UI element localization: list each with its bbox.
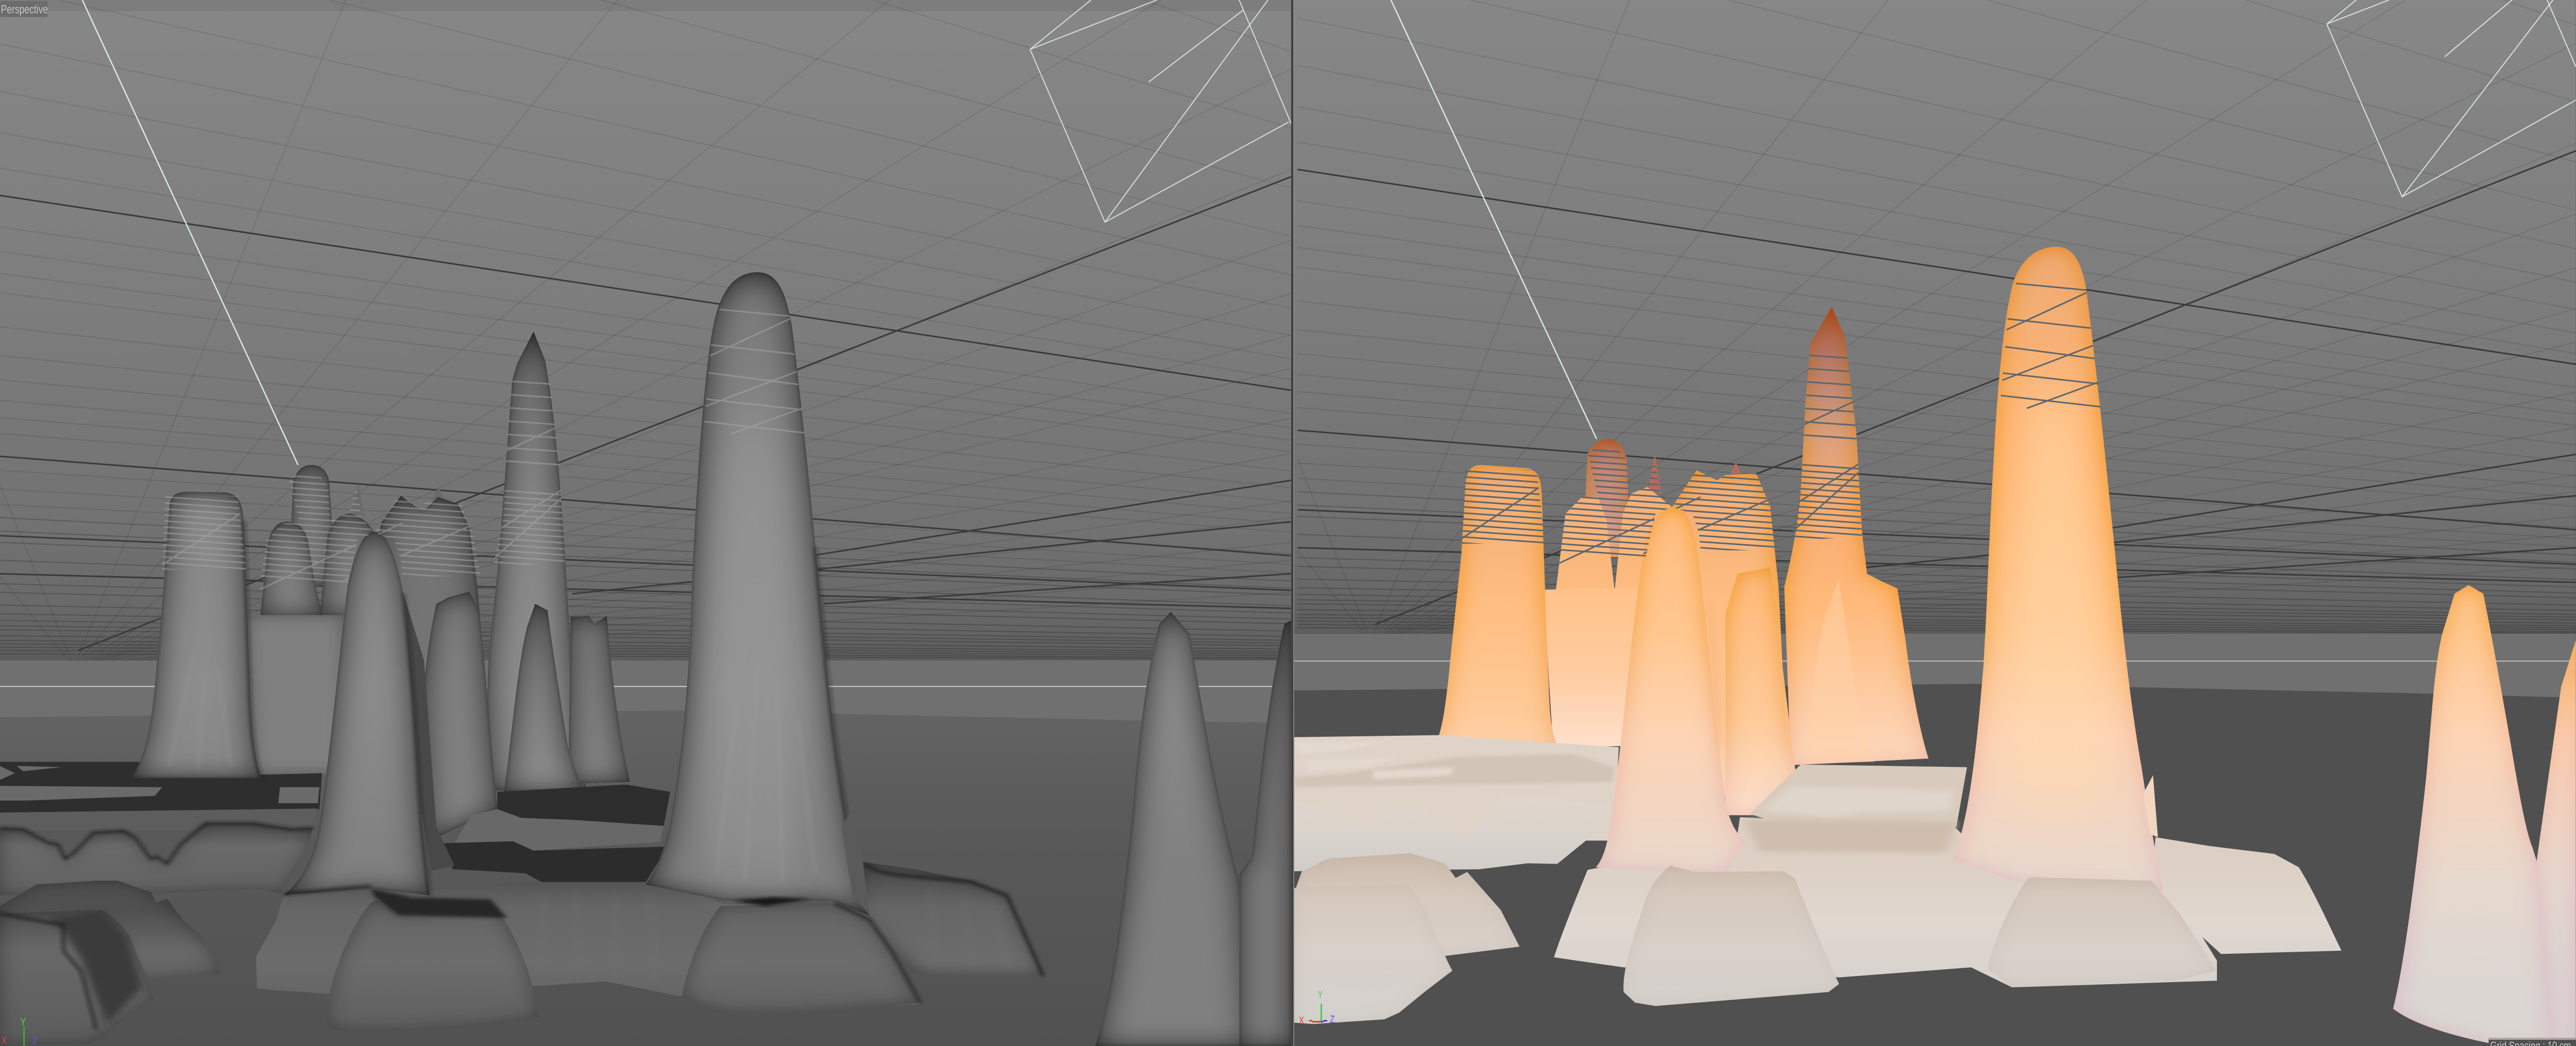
main spire highlight bbox=[708, 414, 799, 881]
view name tag: Perspective bbox=[1, 3, 48, 16]
crease line on front left piece bbox=[0, 913, 96, 1030]
left column right crease bbox=[244, 520, 262, 778]
horizon white line bbox=[1291, 661, 2576, 662]
left big flat-top column bbox=[1432, 465, 1562, 752]
spike: small back bbox=[350, 484, 365, 517]
spike: small red left bbox=[1648, 453, 1662, 494]
dark ground plane bbox=[0, 711, 1267, 890]
viewport header bar bbox=[0, 0, 1291, 11]
spire: back centre stub bbox=[1615, 487, 1676, 591]
crease under main spire bbox=[733, 897, 811, 906]
terrain piece: front left rear bbox=[0, 881, 222, 981]
rear terrain band bbox=[0, 808, 317, 831]
cluster of mid spires bbox=[377, 496, 496, 814]
terrace behind centre bbox=[1750, 765, 1967, 827]
grid lines showing through spire tops bbox=[1455, 281, 2102, 573]
front spire bbox=[1596, 507, 1745, 874]
spire: back centre stub bbox=[319, 514, 380, 616]
plateau pale ledge bbox=[1294, 742, 1455, 779]
axis gizmo right: Z bbox=[1330, 1014, 1335, 1025]
spike: small red right bbox=[1731, 462, 1741, 474]
axis gizmo right: X bbox=[1299, 1015, 1304, 1026]
spire: far back rounded bbox=[288, 465, 333, 587]
plateau pale slivers bbox=[0, 766, 319, 803]
front spire right crease bbox=[403, 594, 430, 895]
central terrain mass bbox=[257, 882, 921, 1014]
centre terrace band bbox=[1743, 819, 1956, 853]
spire: back inner pale bbox=[1803, 579, 1874, 764]
bump: under main spire bbox=[1988, 878, 2217, 987]
main spire right crease bbox=[815, 547, 858, 867]
dark ground plane bbox=[1291, 684, 2576, 1046]
rear dark plateau bbox=[0, 762, 322, 813]
pale terrace strip bbox=[1762, 786, 1955, 817]
spire: lower right bbox=[1095, 612, 1251, 1046]
axis gizmo left: Y bbox=[21, 1016, 26, 1027]
long white wire edge bbox=[82, 0, 298, 465]
crease lines on terrain bbox=[284, 886, 921, 1003]
wireframe camera box bbox=[2327, 0, 2576, 197]
horizon band bbox=[0, 661, 1291, 727]
spire: far back red tip bbox=[1583, 439, 1630, 557]
main spire bbox=[646, 272, 870, 915]
upper dark terrace middle bbox=[497, 785, 670, 826]
axis gizmo left bbox=[2, 1016, 37, 1046]
sky backdrop bbox=[0, 0, 1291, 661]
main spire glow bbox=[2012, 400, 2102, 801]
rear terrain wall with jagged top bbox=[0, 823, 313, 895]
left lobe under front spire bbox=[256, 890, 379, 994]
bump: under main spire bbox=[682, 903, 921, 1014]
left big flat-top column bbox=[132, 492, 262, 778]
grid lines showing through spire tops bbox=[156, 308, 806, 600]
rear plateau terrain bbox=[1294, 735, 1619, 840]
axis gizmo left: X bbox=[2, 1035, 7, 1046]
long white wire edge bbox=[1391, 0, 1597, 439]
panel: orange temperature-shaded viewport bbox=[1291, 0, 2576, 1046]
perspective floor grid bbox=[1297, 0, 2576, 641]
spike: small back right bbox=[431, 487, 445, 500]
terrain piece: front left near bbox=[0, 910, 155, 1046]
central terrain mass bbox=[1554, 817, 2217, 987]
left column streaks bbox=[169, 654, 230, 770]
right terrain lobe bbox=[856, 862, 1043, 976]
panel: grey clay-shaded viewport bbox=[0, 0, 1291, 1046]
spire: back left stub bbox=[1555, 497, 1615, 593]
sky backdrop bbox=[1291, 0, 2576, 634]
pale terrace middle bbox=[454, 809, 664, 851]
block wall between columns bbox=[245, 615, 349, 774]
central terrain streaks bbox=[539, 887, 1009, 981]
back right ridge bbox=[568, 616, 630, 784]
horizon white line bbox=[0, 686, 1291, 687]
front spire side sliver bbox=[403, 594, 454, 871]
spire: back inner bbox=[504, 604, 583, 792]
spire: far right edge bbox=[2536, 640, 2576, 1046]
rear wall crease line bbox=[0, 823, 313, 864]
bump: front centre bbox=[1623, 865, 1839, 1006]
axis gizmo left: Z bbox=[32, 1035, 37, 1046]
spire: back left stub bbox=[260, 521, 323, 616]
spire: mid jagged top bbox=[1725, 567, 1798, 815]
rear terrain wall with jagged top bbox=[1294, 797, 1611, 871]
horizon band bbox=[1291, 634, 2576, 700]
main spire jagged side fin bbox=[841, 803, 870, 915]
spire: tall red-tipped needle bbox=[1784, 307, 1928, 765]
spire: mid jagged top bbox=[423, 592, 497, 842]
terrain piece: front left near bbox=[1294, 885, 1452, 1024]
plateau darker terrace bbox=[1294, 754, 1614, 787]
central dark terrace bbox=[443, 841, 668, 884]
terrain piece: front left rear bbox=[1296, 853, 1519, 956]
wireframe camera box bbox=[1030, 0, 1291, 222]
main spire side fin bbox=[2143, 775, 2158, 837]
bump: front centre bbox=[327, 900, 539, 1032]
front spire bbox=[284, 532, 430, 895]
viewport divider bbox=[1292, 0, 1294, 1046]
block wall between columns bbox=[1544, 588, 1641, 747]
crease band on front left piece bbox=[49, 912, 142, 1024]
perspective floor grid bbox=[0, 0, 1291, 667]
spire: tall back needle bbox=[487, 331, 586, 790]
main spire bbox=[1953, 247, 2164, 890]
spire: far right edge bbox=[1239, 620, 1291, 1046]
crease band on bump bbox=[370, 889, 507, 918]
cluster of mid spires bbox=[1668, 470, 1795, 801]
main spire streaks bbox=[716, 667, 815, 881]
right lobe crease bbox=[865, 864, 1043, 976]
right terrain lobe bbox=[2151, 837, 2342, 954]
front spire right streak bbox=[1705, 600, 1725, 747]
axis gizmo right: Y bbox=[1318, 989, 1323, 1000]
axis gizmo right bbox=[1299, 989, 1335, 1026]
spire: lower right bbox=[2393, 585, 2553, 1046]
grid spacing tag bbox=[2488, 1038, 2576, 1046]
